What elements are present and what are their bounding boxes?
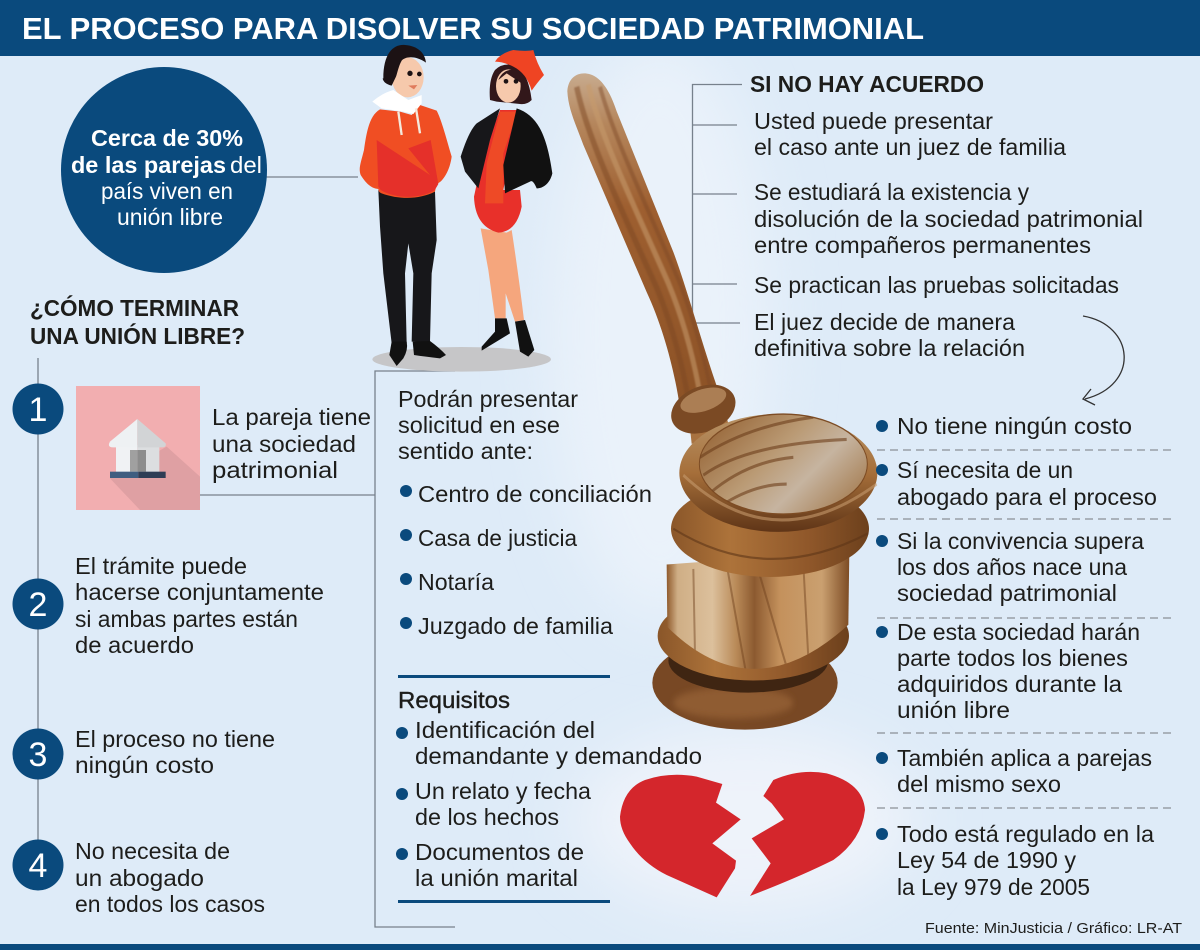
- step 1: La pareja tiene: [212, 404, 371, 430]
- step 2: [12, 553, 324, 658]
- step 4: en todos los casos: [75, 891, 265, 917]
- step 4: 4: [29, 847, 47, 885]
- text block: if there is no agreement: definitiva sobre la relación: [754, 335, 1025, 361]
- step 2: 2: [29, 586, 47, 624]
- text block: if there is no agreement: entre compañeros permanentes: [754, 232, 1091, 258]
- list: requirements: Identificación del: [415, 717, 595, 743]
- text block: if there is no agreement: [750, 71, 1143, 361]
- list: key facts: unión libre: [897, 697, 1010, 723]
- illustration: wooden gavel: [567, 73, 877, 730]
- list: key facts: Si la convivencia supera: [897, 528, 1144, 554]
- bottom band: [0, 944, 1200, 950]
- list: requirements: de los hechos: [415, 804, 559, 830]
- step 1: una sociedad: [212, 431, 356, 457]
- source credit: Fuente: MinJusticia / Gráfico: LR-AT: [925, 920, 1182, 937]
- circle callout: 30% of couples: [61, 67, 267, 273]
- collar: [668, 377, 739, 441]
- list: key facts: sociedad patrimonial: [897, 580, 1117, 606]
- circle callout: 30% of couples: Cerca de 30%: [91, 125, 243, 151]
- text block: if there is no agreement: el caso ante un juez de familia: [754, 134, 1066, 160]
- text block: if there is no agreement: Se estudiará la existencia y: [754, 179, 1029, 205]
- list: key facts: No tiene ningún costo: [897, 413, 1132, 439]
- illustration: couple: [360, 45, 552, 372]
- list: key facts: abogado para el proceso: [897, 484, 1157, 510]
- ring: [658, 591, 849, 681]
- list: requirements: Documentos de: [415, 839, 584, 865]
- list: key facts: adquiridos durante la: [897, 671, 1122, 697]
- list: filing venues: Juzgado de familia: [418, 613, 613, 639]
- step 4: un abogado: [75, 865, 204, 891]
- list: key facts: del mismo sexo: [897, 771, 1061, 797]
- man: [360, 45, 452, 366]
- woman: [461, 50, 552, 357]
- list: key facts: Todo está regulado en la: [897, 821, 1154, 847]
- step 2: El trámite puede: [75, 553, 247, 579]
- list: filing venues: Notaría: [418, 569, 494, 595]
- step 4: [12, 838, 265, 917]
- list: key facts: Sí necesita de un: [897, 457, 1073, 483]
- circle callout: 30% of couples: unión libre: [117, 204, 223, 230]
- step 3: 3: [29, 736, 47, 774]
- text block: where to file: sentido ante:: [398, 438, 533, 464]
- step 1: 1: [29, 391, 47, 429]
- step 2: si ambas partes están: [75, 606, 298, 632]
- list: requirements: la unión marital: [415, 865, 578, 891]
- arrow: curved down to notes: [1083, 316, 1124, 405]
- list: key facts: [876, 413, 1173, 900]
- step 2: de acuerdo: [75, 632, 194, 658]
- step 1: patrimonial: [212, 457, 338, 483]
- handle: [567, 73, 717, 408]
- list: key facts: También aplica a parejas: [897, 745, 1152, 771]
- circle callout: 30% of couples: del: [230, 152, 262, 178]
- top disk: [679, 414, 877, 532]
- list: requirements: [396, 675, 702, 903]
- body: [667, 551, 849, 669]
- text block: if there is no agreement: Se practican las pruebas solicitadas: [754, 272, 1119, 298]
- header band with title: EL PROCESO PARA DISOLVER SU SOCIEDAD PATRIMONIAL: [22, 11, 924, 46]
- step 3: [12, 726, 275, 780]
- text block: where to file: Podrán presentar: [398, 386, 578, 412]
- text block: if there is no agreement: disolución de la sociedad patrimonial: [754, 206, 1143, 232]
- list: key facts: los dos años nace una: [897, 554, 1127, 580]
- list: requirements: Un relato y fecha: [415, 778, 591, 804]
- step 3: ningún costo: [75, 752, 214, 778]
- upper band: [671, 481, 869, 577]
- list: filing venues: [400, 481, 652, 639]
- icon: house tile: [76, 386, 200, 510]
- text block: if there is no agreement: SI NO HAY ACUERDO: [750, 71, 984, 97]
- text block: if there is no agreement: Usted puede presentar: [754, 108, 993, 134]
- heading: how to end a civil union: [30, 294, 245, 349]
- list: key facts: De esta sociedad harán: [897, 619, 1140, 645]
- text block: where to file: solicitud en ese: [398, 412, 560, 438]
- step 1: [12, 384, 371, 483]
- list: key facts: parte todos los bienes: [897, 645, 1128, 671]
- heading: how to end a civil union: UNA UNIÓN LIBRE?: [30, 322, 245, 349]
- list: key facts: la Ley 979 de 2005: [897, 874, 1090, 900]
- bottom flange: [652, 636, 838, 730]
- circle callout: 30% of couples: país viven en: [101, 178, 233, 204]
- connector lines: [38, 84, 742, 927]
- text block: where to file: [398, 386, 578, 464]
- list: requirements: demandante y demandado: [415, 743, 702, 769]
- text block: if there is no agreement: El juez decide de manera: [754, 309, 1015, 335]
- step 3: El proceso no tiene: [75, 726, 275, 752]
- heading: how to end a civil union: ¿CÓMO TERMINAR: [30, 294, 239, 321]
- circle callout: 30% of couples: de las parejas: [71, 152, 226, 178]
- neck: [688, 404, 730, 444]
- list: key facts: Ley 54 de 1990 y: [897, 847, 1076, 873]
- step 4: No necesita de: [75, 838, 230, 864]
- step 2: hacerse conjuntamente: [75, 579, 324, 605]
- list: filing venues: Centro de conciliación: [418, 481, 652, 507]
- header band with title: [0, 0, 1200, 56]
- list: filing venues: Casa de justicia: [418, 525, 577, 551]
- list: requirements: Requisitos: [398, 687, 510, 713]
- illustration: broken heart: [620, 772, 865, 897]
